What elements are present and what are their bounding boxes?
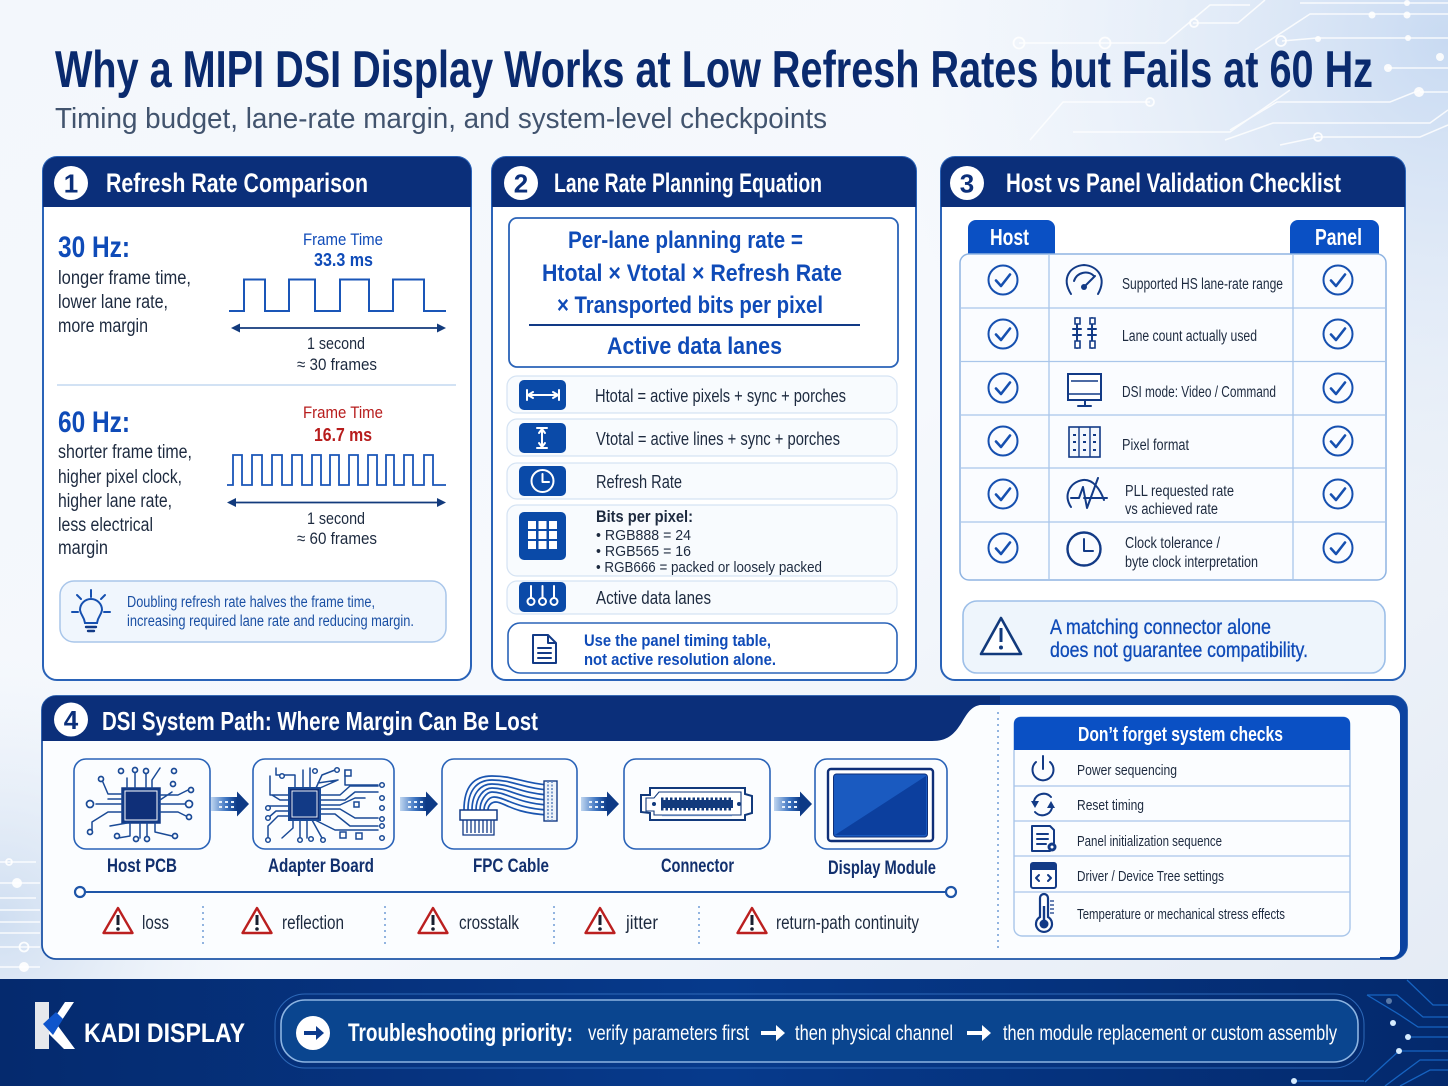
row: HS lane-rate — [988, 265, 1352, 294]
node: Display Module: Display Module — [828, 858, 936, 879]
node: FPC Cable: FPC Cable — [473, 856, 549, 877]
check: temperature — [1036, 894, 1285, 932]
30 Hz frame time: 33.3 ms — [314, 250, 373, 270]
panel 4 header — [42, 696, 1000, 741]
row: lane count — [988, 318, 1352, 348]
risk: return-path continuity — [738, 908, 919, 934]
troubleshooting priority bar: then physical channel — [795, 1022, 953, 1045]
tab: Host: Host — [990, 224, 1029, 250]
30 Hz frame count: ≈ 30 frames — [297, 355, 377, 374]
callout: connector warning — [963, 601, 1385, 673]
row: DSI mode: DSI mode: Video / Command — [1122, 384, 1276, 401]
60 Hz frame count: ≈ 60 frames — [297, 529, 377, 548]
panel 4: DSI system path — [42, 696, 1407, 959]
risk: crosstalk: crosstalk — [459, 913, 519, 934]
troubleshooting priority bar: then module replacement or custom assembly — [1003, 1022, 1337, 1045]
callout: doubling refresh rate: increasing required lane rate and reducing margin. — [127, 613, 414, 630]
node: Display Module — [815, 759, 947, 879]
row: clock tolerance: Clock tolerance / — [1125, 535, 1221, 552]
arrow: adapter to FPC — [400, 792, 438, 816]
note: use the panel timing table — [508, 623, 897, 673]
row: refresh rate: Refresh Rate — [596, 472, 682, 492]
row: bits per pixel: Bits per pixel: — [596, 507, 693, 526]
panel 2 header — [492, 157, 916, 207]
row: Htotal — [507, 376, 897, 413]
row: Vtotal — [507, 419, 897, 456]
panel 4 header: 4 — [64, 705, 79, 735]
panel 3: host vs panel validation checklist — [941, 157, 1405, 680]
logo: Kadi Display: KADI DISPLAY — [84, 1018, 245, 1048]
subtitle: Timing budget, lane-rate margin, and system-level checkpoints — [55, 103, 827, 135]
equation box: Active data lanes — [607, 333, 782, 360]
row: active data lanes: Active data lanes — [596, 588, 711, 608]
tab: Panel: Panel — [1315, 224, 1362, 250]
panel 1 header: 1 — [64, 168, 78, 198]
60 Hz waveform — [227, 455, 446, 485]
row: DSI mode — [988, 374, 1352, 406]
30 Hz description: lower lane rate, — [58, 292, 168, 313]
equation box: Htotal × Vtotal × Refresh Rate — [542, 260, 842, 287]
risk: jitter: jitter — [625, 913, 659, 934]
60 Hz one second arrow — [227, 498, 446, 507]
30 Hz frame time: Frame Time — [303, 231, 383, 249]
arrow: step one to two — [761, 1025, 785, 1041]
60 Hz description: margin — [58, 538, 108, 559]
row: active data lanes — [507, 581, 897, 614]
equation box: Per-lane planning rate = — [568, 227, 803, 254]
30 Hz waveform — [229, 280, 446, 311]
panel 1 header: Refresh Rate Comparison — [106, 168, 368, 198]
row: PLL — [988, 478, 1352, 518]
callout: doubling refresh rate — [60, 581, 446, 642]
check: driver device tree: Driver / Device Tree settings — [1077, 868, 1224, 885]
risk: reflection — [242, 908, 344, 934]
system checks heading — [1014, 717, 1350, 750]
check: power sequencing — [1032, 756, 1177, 780]
arrow: host to adapter — [211, 792, 249, 816]
row: bits per pixel: • RGB888 = 24 — [596, 527, 691, 544]
60 Hz frame time — [303, 404, 383, 445]
risk: jitter — [586, 908, 659, 934]
check: power sequencing: Power sequencing — [1077, 762, 1177, 779]
30 Hz description: more margin — [58, 316, 148, 337]
node: Connector — [624, 759, 770, 877]
check: reset timing: Reset timing — [1077, 797, 1144, 814]
system checks box — [1014, 717, 1350, 936]
risk: return-path continuity: return-path continuity — [776, 913, 919, 934]
row: lane count: Lane count actually used — [1122, 328, 1257, 345]
panel 2 header: Lane Rate Planning Equation — [554, 168, 822, 198]
node: Host PCB: Host PCB — [107, 856, 177, 877]
check: reset timing — [1031, 794, 1144, 815]
callout: connector warning: A matching connector alone — [1050, 616, 1271, 639]
60 Hz description: shorter frame time, — [58, 442, 192, 463]
row: pixel format — [988, 426, 1352, 457]
row: PLL: vs achieved rate — [1125, 501, 1218, 518]
60 Hz frame time: Frame Time — [303, 404, 383, 422]
row: PLL: PLL requested rate — [1125, 483, 1234, 500]
troubleshooting priority bar: verify parameters first — [588, 1022, 749, 1045]
logo: Kadi Display — [35, 1002, 245, 1049]
signal path line — [75, 887, 956, 897]
panel 2 header: 2 — [514, 168, 528, 198]
row: HS lane-rate: Supported HS lane-rate range — [1122, 276, 1283, 293]
panel 3 header: 3 — [960, 168, 974, 198]
callout: connector warning: does not guarantee compatibility. — [1050, 639, 1308, 662]
60 Hz frame count: 1 second — [307, 509, 365, 528]
troubleshooting priority bar: Troubleshooting priority: — [348, 1019, 573, 1047]
check: driver device tree — [1031, 863, 1224, 888]
risk: loss: loss — [142, 913, 169, 934]
60 Hz description — [58, 406, 192, 559]
row: refresh rate — [507, 463, 897, 499]
node: FPC Cable — [442, 759, 577, 877]
60 Hz description: higher pixel clock, — [58, 467, 182, 488]
30 Hz frame time — [303, 231, 383, 270]
risk: reflection: reflection — [282, 913, 344, 934]
check: temperature: Temperature or mechanical stress effects — [1077, 906, 1285, 923]
60 Hz description: less electrical — [58, 515, 153, 536]
troubleshooting priority bar — [275, 994, 1364, 1068]
row: Htotal: Htotal = active pixels + sync + porches — [595, 386, 846, 406]
60 Hz frame count — [297, 509, 377, 548]
row: pixel format: Pixel format — [1122, 437, 1190, 454]
row: clock tolerance: byte clock interpretation — [1125, 554, 1258, 571]
risk: crosstalk — [418, 908, 519, 934]
30 Hz description: 30 Hz: — [58, 231, 130, 264]
tab: Host — [968, 220, 1055, 254]
row: Vtotal: Vtotal = active lines + sync + porches — [596, 429, 840, 449]
30 Hz frame count: 1 second — [307, 334, 365, 353]
30 Hz description: longer frame time, — [58, 268, 191, 289]
equation box: × Transported bits per pixel — [557, 292, 823, 319]
tab: Panel — [1290, 220, 1379, 254]
equation box — [509, 218, 898, 367]
node: Adapter Board: Adapter Board — [268, 856, 374, 877]
60 Hz description: higher lane rate, — [58, 491, 172, 512]
note: use the panel timing table: Use the panel timing table, — [584, 631, 771, 650]
panel 1 header — [43, 157, 471, 207]
row: clock tolerance — [988, 532, 1352, 571]
row: bits per pixel — [507, 505, 897, 576]
row: bits per pixel: • RGB666 = packed or loosely packed — [596, 559, 822, 576]
panel 3 header — [941, 157, 1405, 207]
60 Hz frame time: 16.7 ms — [314, 425, 372, 445]
node: Adapter Board — [253, 759, 394, 877]
callout: doubling refresh rate: Doubling refresh rate halves the frame time, — [127, 594, 375, 611]
node: Host PCB — [74, 759, 210, 877]
node: Connector: Connector — [661, 856, 734, 877]
30 Hz frame count — [297, 334, 377, 374]
checklist table — [960, 254, 1386, 580]
risk: loss — [104, 908, 169, 934]
check: panel initialization — [1032, 826, 1222, 852]
row: bits per pixel: • RGB565 = 16 — [596, 543, 691, 560]
check: panel initialization: Panel initialization sequence — [1077, 833, 1222, 850]
panel 4 header: DSI System Path: Where Margin Can Be Lost — [102, 706, 538, 736]
panel 1: refresh rate comparison — [43, 157, 471, 680]
footer bar — [0, 979, 1448, 1086]
system checks heading: Don’t forget system checks — [1078, 724, 1283, 746]
arrow: connector to display — [774, 792, 812, 816]
note: use the panel timing table: not active resolution alone. — [584, 650, 776, 669]
panel 3 header: Host vs Panel Validation Checklist — [1006, 168, 1341, 198]
30 Hz description — [58, 231, 191, 337]
panel 2: lane rate planning equation — [492, 157, 916, 680]
arrow: FPC to connector — [581, 792, 619, 816]
arrow: step two to three — [967, 1025, 991, 1041]
60 Hz description: 60 Hz: — [58, 406, 130, 439]
30 Hz one second arrow — [231, 324, 446, 332]
icon: light bulb — [72, 590, 110, 631]
